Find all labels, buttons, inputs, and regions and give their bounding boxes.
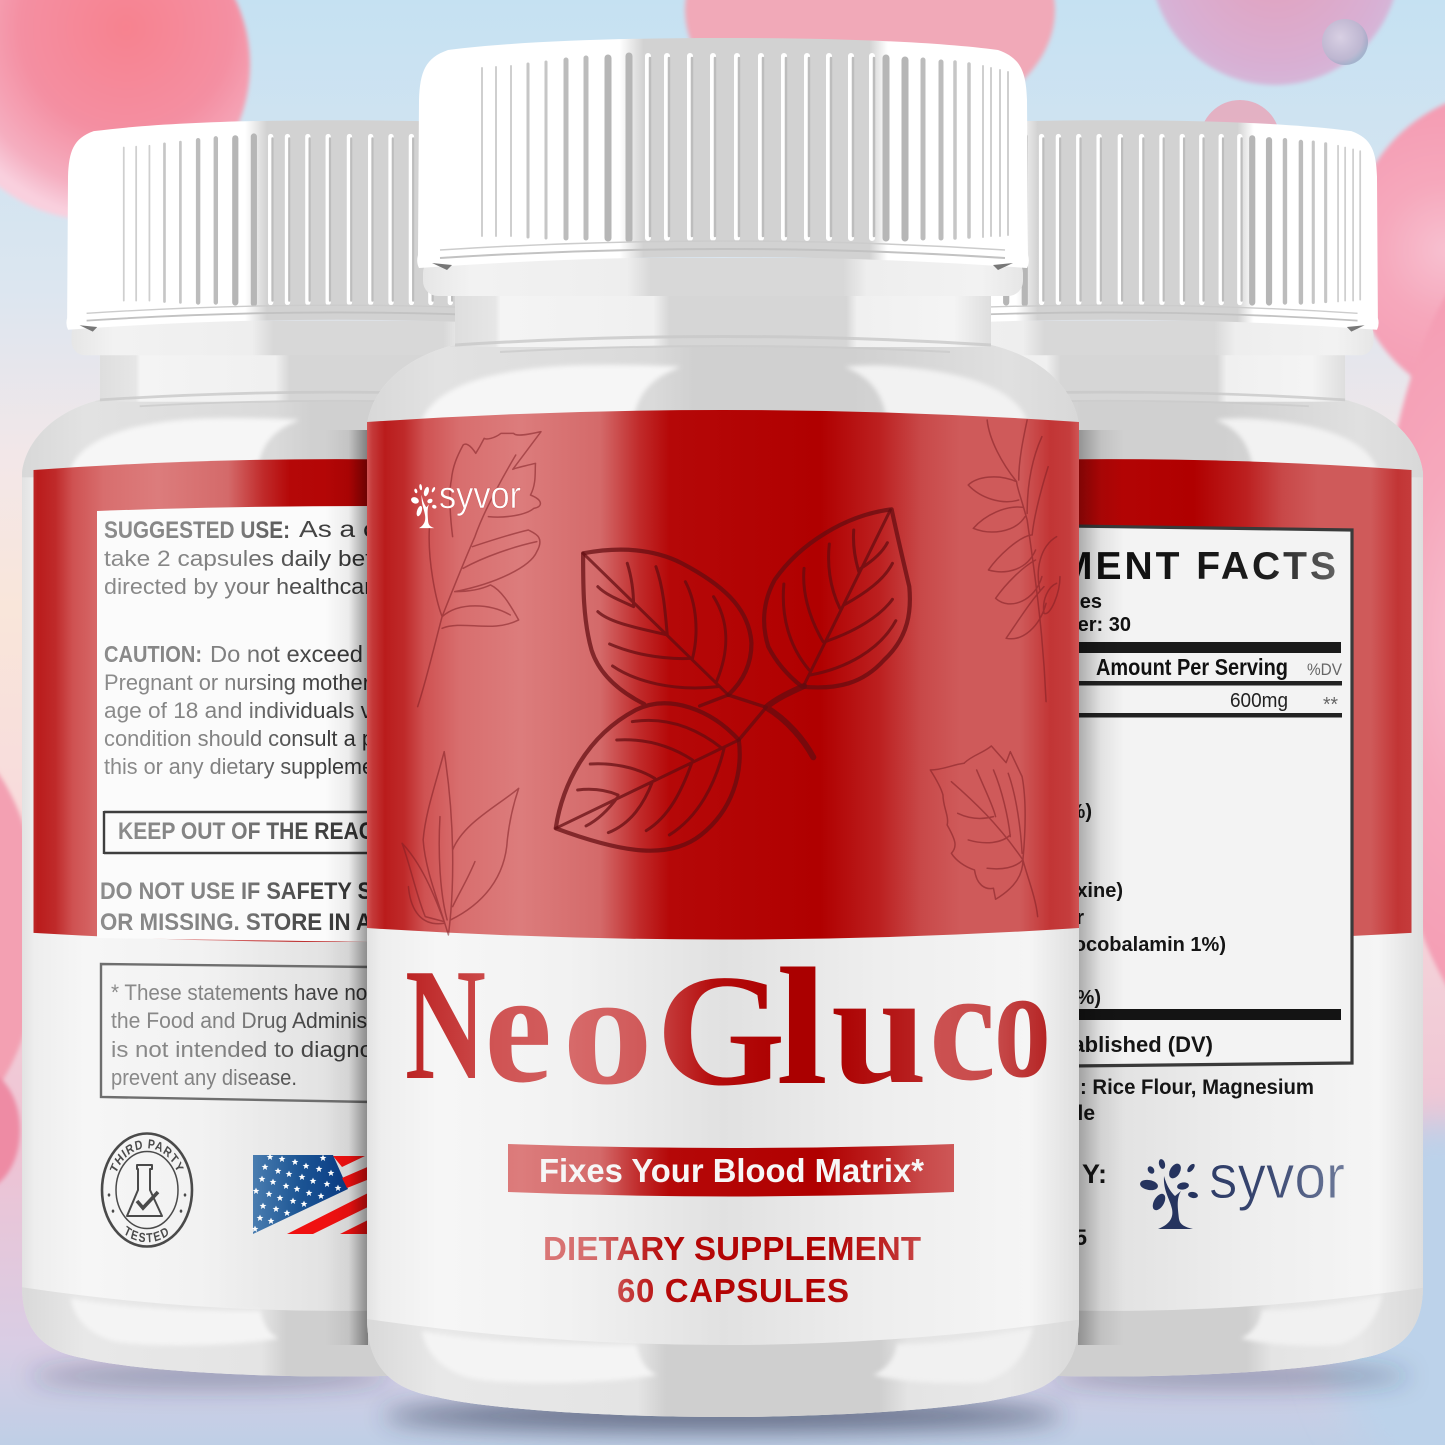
- suggested use text: take 2 capsules daily bet: [104, 546, 372, 571]
- dietary supplement text: [543, 1230, 921, 1309]
- shadow: back bottles: [30, 1364, 1410, 1388]
- product name: o: [562, 941, 653, 1118]
- other ingredients text: 5: [1075, 1225, 1087, 1250]
- icon: third party tested badge: TESTED: [125, 1226, 168, 1242]
- dietary supplement text: 60 CAPSULES: [617, 1272, 849, 1309]
- safety warning text: DO NOT USE IF SAFETY S: [100, 878, 372, 905]
- caution text: Do not exceed: [210, 641, 363, 667]
- product name: [405, 934, 1051, 1120]
- label panel: directions: [97, 506, 377, 942]
- product name: e: [484, 938, 552, 1116]
- front bottle: [360, 38, 1090, 1425]
- dietary supplement text: DIETARY SUPPLEMENT: [543, 1230, 921, 1267]
- supplement facts heading: MENT FACTS: [1060, 545, 1336, 588]
- right back bottle: [787, 120, 1433, 1384]
- facts table header bars: %DV: [1307, 660, 1343, 679]
- product name: c: [929, 937, 996, 1114]
- icon: american flag: [252, 1154, 372, 1234]
- suggested use text: directed by your healthcar: [104, 574, 372, 599]
- ingredient fragments: r: [1076, 907, 1084, 929]
- caution text: CAUTION:: [104, 641, 202, 667]
- other ingredients text: : Rice Flour, Magnesium: [1080, 1076, 1314, 1099]
- icon: third party tested badge: THIRD PARTY: [110, 1139, 184, 1172]
- logo: syvor navy: [1139, 1143, 1345, 1229]
- suggested use text: [104, 516, 377, 599]
- caution text: age of 18 and individuals v: [104, 698, 372, 723]
- cast shadows from front bottle: [325, 430, 1124, 1345]
- caution text: [104, 641, 374, 779]
- icon: third party tested badge: [100, 1132, 194, 1248]
- ingredient fragments: %): [1077, 987, 1101, 1009]
- FDA disclaimer box: the Food and Drug Administ: [111, 1008, 373, 1033]
- product name: u: [831, 941, 927, 1118]
- other ingredients text: Y:: [1082, 1159, 1107, 1189]
- decorative line leaves: [402, 420, 1060, 935]
- keep out of reach box: KEEP OUT OF THE REAC: [118, 818, 374, 845]
- caution text: this or any dietary suppleme: [104, 754, 374, 779]
- other ingredients text: le: [1077, 1102, 1095, 1125]
- bottle body and cap: left: [16, 120, 662, 1384]
- main three-leaf illustration: [556, 509, 910, 851]
- serving information: les: [1074, 591, 1102, 613]
- logo: syvor navy: syvor: [1209, 1143, 1345, 1212]
- keep out of reach box: [104, 811, 374, 854]
- supplement facts panel: [1060, 526, 1352, 1066]
- serving information: [1074, 591, 1131, 636]
- FDA disclaimer box: is not intended to diagno: [111, 1037, 373, 1062]
- panel: red label band: [367, 410, 1079, 940]
- caution text: condition should consult a p: [104, 726, 374, 751]
- bottle body and cap: right: [787, 120, 1433, 1384]
- ingredient fragments: %): [1068, 801, 1092, 823]
- left back bottle: [22, 120, 455, 1376]
- facts table header bars: [1070, 642, 1343, 718]
- product name: G: [656, 943, 785, 1119]
- ingredient fragments: ocobalamin 1%): [1074, 934, 1226, 956]
- bottle body and cap: front: [360, 38, 1090, 1425]
- logo: syvor white: syvor: [439, 475, 521, 517]
- FDA disclaimer box: * These statements have not: [111, 980, 373, 1005]
- product name: o: [994, 934, 1051, 1112]
- safety warning text: OR MISSING. STORE IN A: [100, 909, 372, 936]
- product name: N: [405, 935, 486, 1113]
- facts table header bars: **: [1323, 694, 1338, 716]
- suggested use text: As a c: [299, 516, 377, 542]
- tagline banner: [508, 1144, 954, 1196]
- tagline banner: Fixes Your Blood Matrix*: [539, 1152, 924, 1189]
- product name: l: [776, 935, 828, 1120]
- ingredient fragments: [1068, 801, 1226, 1009]
- facts table header bars: 600mg: [1230, 690, 1288, 712]
- ingredient fragments: xine): [1076, 880, 1123, 902]
- FDA disclaimer box: prevent any disease.: [111, 1065, 297, 1090]
- facts table header bars: Amount Per Serving: [1096, 654, 1288, 680]
- serving information: er: 30: [1078, 614, 1131, 636]
- daily value footnote: tablished (DV): [1065, 1032, 1213, 1057]
- other ingredients text: [1075, 1076, 1314, 1250]
- safety warning text: [100, 878, 372, 936]
- FDA disclaimer box: [101, 964, 373, 1102]
- logo: syvor white: [411, 475, 521, 528]
- caution text: Pregnant or nursing mother: [104, 670, 370, 695]
- suggested use text: SUGGESTED USE:: [104, 517, 290, 544]
- shadow: front bottle: [383, 1400, 1063, 1432]
